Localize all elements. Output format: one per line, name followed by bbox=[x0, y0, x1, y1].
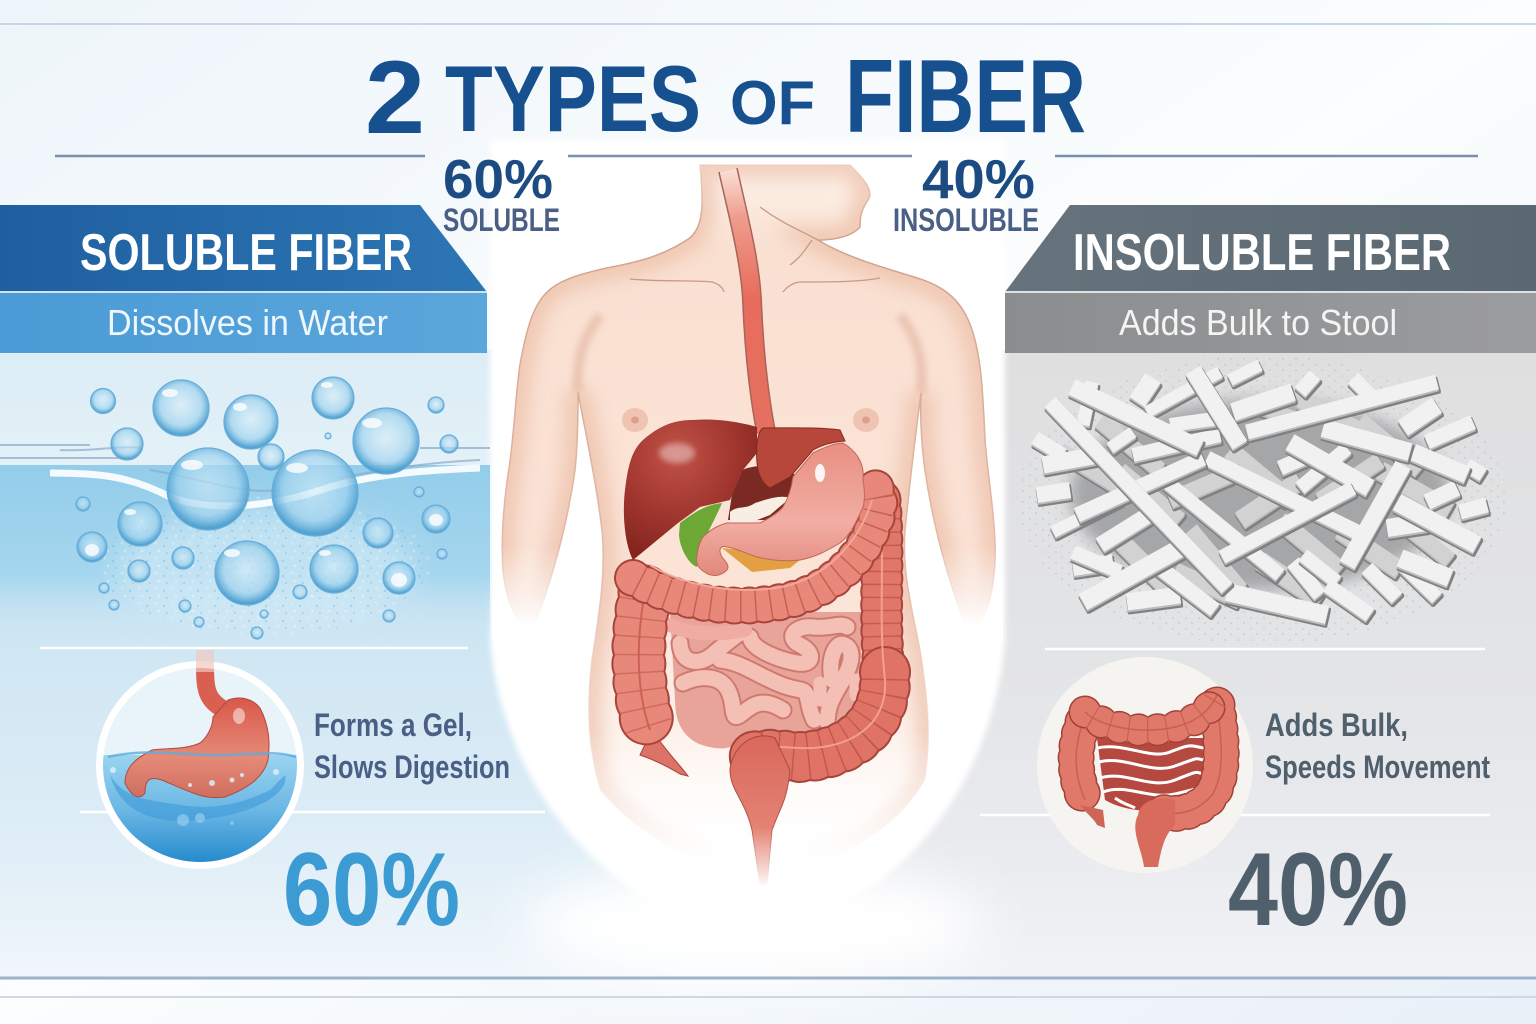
dark cavity behind stomach bbox=[728, 466, 800, 520]
panel: soluble header: Dissolves in Water bbox=[107, 302, 388, 343]
text: adds bulk bbox=[1265, 707, 1490, 785]
pancreas bbox=[730, 497, 790, 522]
panel: insoluble header: Adds Bulk to Stool bbox=[1119, 302, 1397, 343]
icon: colon bbox=[1037, 657, 1253, 873]
liver lobe bbox=[757, 428, 845, 488]
panel: insoluble header: INSOLUBLE FIBER bbox=[1073, 224, 1451, 282]
pile shadow bbox=[1070, 400, 1450, 590]
front sticks bbox=[1050, 370, 1477, 615]
yellow and orange ducts bbox=[722, 548, 800, 572]
panel: soluble header: SOLUBLE FIBER bbox=[80, 224, 412, 282]
illustration: insoluble fiber sticks bbox=[1017, 355, 1507, 645]
liver highlight bbox=[659, 443, 695, 463]
panel: soluble header bbox=[0, 205, 487, 353]
stomach bbox=[697, 443, 864, 575]
rectum bbox=[730, 736, 790, 885]
filler sticks in the gaps bbox=[1060, 400, 1450, 600]
ascending colon bbox=[639, 592, 688, 776]
speckled dust under the pile bbox=[1017, 355, 1507, 645]
panel: insoluble background bbox=[770, 350, 1536, 978]
esophagus outline bbox=[728, 170, 766, 432]
stat: 40% insoluble bbox=[893, 148, 1039, 238]
stat: 40% insoluble: INSOLUBLE bbox=[893, 202, 1039, 238]
rectum bbox=[1135, 798, 1175, 867]
soft bottom glow bbox=[525, 865, 985, 985]
title bbox=[365, 39, 1086, 156]
collarbones and jaw lines bbox=[630, 207, 880, 292]
gallbladder bbox=[679, 503, 722, 567]
text: forms a gel: Slows Digestion bbox=[314, 749, 510, 785]
title: 2 bbox=[365, 40, 425, 156]
sigmoid colon bbox=[750, 500, 885, 758]
center white arch bbox=[490, 140, 1005, 924]
back sticks bbox=[1035, 365, 1487, 615]
illustration: human torso bbox=[492, 165, 1003, 885]
stat: 40% insoluble: 40% bbox=[922, 148, 1035, 210]
transverse colon bbox=[633, 487, 879, 606]
appendix bbox=[1080, 805, 1105, 828]
icon: stomach in water bbox=[96, 650, 304, 869]
ascending colon segment bbox=[1076, 722, 1085, 800]
descending colon bbox=[880, 500, 885, 680]
text: forms a gel: Forms a Gel, bbox=[314, 707, 472, 743]
esophagus fill bbox=[728, 170, 766, 432]
stat: 60 percent: 60% bbox=[283, 832, 460, 948]
stat: 60% soluble: 60% bbox=[443, 148, 553, 210]
left arm fade out bbox=[492, 545, 583, 640]
panel: soluble background bbox=[0, 350, 770, 978]
stat: 60% soluble bbox=[443, 148, 560, 238]
descending colon segment bbox=[1160, 705, 1221, 813]
middle folds bbox=[1097, 738, 1203, 811]
stat: 60% soluble: SOLUBLE bbox=[443, 202, 560, 238]
nipples bbox=[622, 408, 879, 432]
divider lines bbox=[40, 648, 1490, 815]
transverse colon segment bbox=[1085, 695, 1217, 730]
stomach highlight bbox=[815, 464, 825, 482]
small intestine bbox=[670, 612, 863, 748]
title: TYPES bbox=[445, 46, 701, 151]
soft skin shading and fades bbox=[502, 165, 995, 880]
right arm fade out bbox=[934, 545, 1003, 640]
liver bbox=[624, 419, 757, 560]
panel: insoluble header bbox=[1005, 205, 1536, 353]
title: FIBER bbox=[845, 39, 1086, 155]
torso skin bbox=[502, 165, 995, 870]
illustration: water and bubbles bbox=[0, 377, 490, 650]
text: adds bulk: Adds Bulk, bbox=[1265, 707, 1408, 743]
stat: 40 percent: 40% bbox=[1228, 832, 1408, 948]
title: OF bbox=[730, 69, 815, 138]
text: forms a gel bbox=[314, 707, 510, 785]
